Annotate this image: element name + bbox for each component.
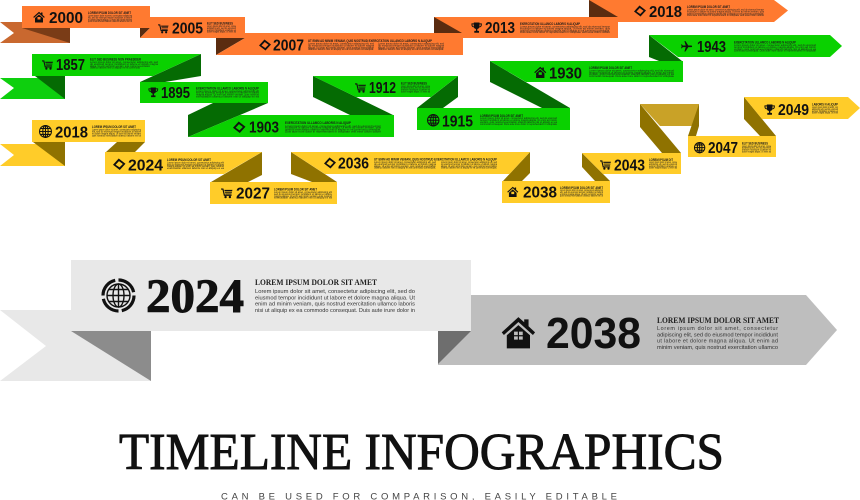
fold: green 1912 left <box>313 76 393 115</box>
segment: yellow 2024: Lorem ipsum dolor sit amet, consectetur adipiscing elit <box>167 161 224 164</box>
year: 2024: 2024 <box>146 270 244 323</box>
segment: yellow 2038: LOREM IPSUM DOLOR SIT AMET <box>560 186 604 190</box>
fold: yellow 2049 left <box>744 97 776 136</box>
fold: yellow 2018 left <box>33 142 65 166</box>
segment: yellow 2036: 2036 <box>338 156 369 172</box>
segment: green 1912: tempor incididunt ut labore et <box>401 89 430 92</box>
segment: yellow 2047: dolore magna aliqua. Ut enim ad <box>742 150 772 154</box>
segment: orange 2013: incididunt ut labore et dolore magna aliqua. Ut enim ad minim veniam, quis <box>520 27 611 30</box>
segment: yellow 2018: elit, sed do eiusmod tempor incididunt ut labore <box>92 130 142 134</box>
ribbon tail: yellow <box>0 144 65 166</box>
segment: orange 2000: quis nostrud exercitation ullamco laboris nisi ut <box>88 20 132 23</box>
ribbon tail: green <box>0 78 65 99</box>
segment: green 1895: 1895 <box>161 85 190 102</box>
segment: yellow 2038: 2038 <box>523 184 557 202</box>
text block: 2038 <box>657 315 779 351</box>
segment: yellow 2038: elit, sed do eiusmod tempor incididunt ut labore <box>560 191 604 194</box>
segment: green 1915: tempor incididunt ut labore et dolore magna aliqua. Ut enim ad minim <box>480 119 557 122</box>
segment: yellow 2024: magna aliqua. Ut enim ad minim veniam, quis nostrud <box>167 165 225 168</box>
segment: yellow 2043: dolore magna aliqua. Ut enim ad <box>649 167 678 170</box>
orange timeline ribbon <box>0 0 788 55</box>
segment: green 1857: 1857 <box>56 57 85 74</box>
segment: yellow 2024: exercitation ullamco laboris nisi ut aliquip ex ea <box>167 167 225 170</box>
segment: green 1857: do eiusmod tempor incididunt ut labore et dolore magna <box>90 63 159 66</box>
segment: yellow 2036 <box>291 152 530 174</box>
text block: 2038: minim veniam, quis nostrud exercitation ullamco <box>657 345 778 351</box>
icon: house <box>502 317 535 348</box>
icon: globe <box>103 280 134 311</box>
segment: green 1912 <box>313 76 458 97</box>
segment: yellow 2047 <box>688 136 776 157</box>
segment: green 1903: Duis aute irure dolor in reprehenderit in voluptate velit esse cillum dolore <box>285 130 382 134</box>
text block: 2024: eiusmod tempor incididunt ut labore et dolore magna aliqua. Ut <box>255 295 416 301</box>
segment: yellow 2036: do eiusmod tempor incididunt ut labore et dolore magna <box>441 163 498 166</box>
segment: green 1943: EXERCITATION ULLAMCO LABORIS N ALIQUIP <box>734 40 797 44</box>
segment: green 1930: Lorem ipsum dolor sit amet, consectetur adipiscing elit, sed do eiusmod <box>589 69 675 72</box>
segment: green 1912: 1912 <box>369 80 396 97</box>
segment: yellow 2027: 2027 <box>236 186 270 202</box>
segment: green 1857: ullamco laboris nisi ut aliquip ex ea commodo <box>90 67 141 70</box>
fold: orange 2000 <box>22 28 70 43</box>
segment: yellow 2018: 2018 <box>55 124 88 142</box>
segment: yellow 2027: magna aliqua. Ut enim ad minim veniam, quis nostrud <box>274 195 333 198</box>
segment: green 1930: 1930 <box>549 66 582 82</box>
segment: yellow 2049: adipiscing elit, sed do eiusmod <box>812 108 839 111</box>
segment: yellow 2047: ELIT SED BUSINESS <box>742 142 769 146</box>
segment: green 1930: tempor incididunt ut labore et dolore magna aliqua. Ut enim ad minim <box>589 71 674 74</box>
segment: orange 2018 <box>589 0 788 22</box>
fold: yellow 2024 right <box>211 152 262 182</box>
segment: orange 2000: LOREM IPSUM DOLOR SIT AMET <box>88 11 132 15</box>
segment: green 1930: commodo consequat. Duis aute irure dolor in reprehenderit in voluptate <box>589 75 675 78</box>
segment: yellow 2047: 2047 <box>708 140 738 157</box>
fold: green 1895 to 1903 <box>188 103 268 137</box>
segment: yellow 2024: 2024 <box>128 158 163 174</box>
text block: 2024: Lorem ipsum dolor sit amet, consectetur adipiscing elit, sed do <box>255 289 415 295</box>
segment: green 1943: tempor incididunt ut labore et dolore magna aliqua. Ut enim ad minim <box>734 46 816 49</box>
segment: orange 2005: adipiscing elit, sed do eiusmod <box>207 27 237 30</box>
segment: yellow 2036: aliqua. Ut enim ad minim veniam, quis nostrud exercitation <box>374 165 437 168</box>
text block: 2038: ut labore et dolore magna aliqua. Ut enim ad <box>657 339 778 345</box>
segment: green 1912: adipiscing elit, sed do eiusmod <box>401 87 431 90</box>
segment: green 1915 <box>417 108 570 130</box>
segment: orange 2005 <box>140 17 245 38</box>
segment: orange 2000 <box>22 6 150 28</box>
segment: yellow 2049: LABORIS N ALIQUIP <box>812 102 839 106</box>
fold: yellow upper loop right <box>688 104 699 136</box>
fold: green 1857 <box>35 76 65 99</box>
segment: orange 2000: Lorem ipsum dolor sit amet, consectetur adipiscing <box>88 14 133 18</box>
text block: 2038: Lorem ipsum dolor sit amet, consectetur <box>657 326 778 332</box>
fold: orange 2007 <box>216 38 245 55</box>
fold: orange 2018 <box>589 0 618 17</box>
title: TIMELINE INFOGRAPHICS <box>119 424 724 481</box>
fold: 2024 <box>71 331 151 381</box>
segment: green 1903 <box>188 115 394 137</box>
fold: green 1930 left <box>490 61 570 108</box>
segment: green 1912: Lorem ipsum dolor sit amet, conse <box>401 85 431 88</box>
segment: yellow 2038: Lorem ipsum dolor sit amet, consectetur adipiscing <box>560 189 604 192</box>
segment: yellow 2027 <box>210 182 337 204</box>
segment: orange 2000: elit, sed do eiusmod tempor incididunt ut labore <box>88 16 133 19</box>
segment: yellow 2047: tempor incididunt ut labore et <box>742 149 771 152</box>
fold: orange 2013 <box>434 17 462 33</box>
segment: green 1895: sed do eiusmod tempor incididunt ut labore et dolore <box>196 92 260 95</box>
segment: yellow 2036: ullamco laboris nisi ut aliquip ex ea commodo consequat. <box>374 167 436 170</box>
segment: green 1857: ELIT SED BUSINESS NON PRAESIDER <box>90 58 141 62</box>
segment: green 1943 <box>649 35 842 57</box>
segment: green 1912: ELIT SED BUSINESS <box>401 82 428 86</box>
enlarged detail: 2024 <box>0 260 471 381</box>
segment: orange 2005: ELIT SED BUSINESS <box>207 22 234 26</box>
segment: green 1930 <box>490 61 683 82</box>
yellow timeline ribbon <box>0 97 860 204</box>
year: 2038: 2038 <box>546 309 641 358</box>
segment: orange 2005: 2005 <box>172 20 203 38</box>
segment: yellow 2049: dolore magna aliqua. Ut enim <box>812 112 838 115</box>
segment: orange 2007: Lorem ipsum dolor sit amet, consectetur adipiscing elit, sed <box>308 42 375 46</box>
fold: yellow 2018 right <box>106 142 145 152</box>
segment: yellow 2043: 2043 <box>614 157 645 174</box>
segment: orange 2005: dolore magna aliqua. Ut enim ad <box>207 31 237 34</box>
enlarged detail: 2038 <box>438 295 837 365</box>
segment: yellow 2047: adipiscing elit, sed do eiusmod <box>742 147 772 150</box>
segment: orange 2007: UT ENIM AD MINIM VENIAM, QUIS NOSTRUD EXERCITATION ULLAMCO LABORIS N ALIQUIP <box>308 39 433 43</box>
segment: orange 2018: incididunt ut labore et dolore magna aliqua. Ut enim ad minim veniam, quis <box>687 10 765 13</box>
segment: orange 2007: Lorem ipsum dolor sit amet, consectetur adipiscing elit, sed <box>378 42 445 46</box>
segment: yellow 2049: tempor incididunt ut labore et <box>812 110 838 113</box>
banner: 2024 <box>71 260 471 331</box>
segment: green 1930: veniam, quis nostrud exercitation ullamco laboris nisi ut aliquip ex ea <box>589 73 675 76</box>
segment: green 1943: Lorem ipsum dolor sit amet, consectetur adipiscing elit, sed do eiusmod <box>734 44 817 47</box>
segment: orange 2007: ullamco laboris nisi ut aliquip ex ea commodo consequat. <box>308 48 374 51</box>
segment: green 1895: Lorem ipsum dolor sit amet, consectetur adipiscing elit <box>196 90 259 93</box>
segment: orange 2007: 2007 <box>273 38 304 54</box>
segment: orange 2013: 2013 <box>485 20 515 37</box>
segment: orange 2013: nostrud exercitation ullamco laboris nisi ut aliquip ex ea commodo consequat. <box>520 29 610 32</box>
fold: yellow 2036 right <box>503 152 530 181</box>
segment: green 1912: dolore magna aliqua. Ut enim ad <box>401 90 431 94</box>
segment: yellow 2036: do eiusmod tempor incididunt ut labore et dolore magna <box>374 163 437 166</box>
segment: green 1903: Lorem ipsum dolor sit amet, consectetur adipiscing elit, sed do eiusmod tempor <box>285 125 381 128</box>
segment: green 1895: exercitation ullamco laboris nisi ut aliquip ex ea <box>196 96 260 98</box>
ribbon tail: 2024 <box>0 310 151 381</box>
segment: green 1943: 1943 <box>697 39 726 56</box>
segment: yellow 2027: exercitation ullamco laboris nisi ut aliquip ex ea <box>274 197 333 200</box>
fold: yellow 2036 left <box>291 152 337 182</box>
segment: yellow 2018 <box>32 120 145 142</box>
segment: green 1857 <box>32 54 201 76</box>
segment: yellow 2043: adipiscing elit, sed do eiusmod <box>649 163 678 166</box>
ribbon tail: orange <box>0 22 70 43</box>
segment: yellow 2036: Lorem ipsum dolor sit amet, consectetur adipiscing elit, sed <box>441 161 498 164</box>
segment: yellow 2024: sed do eiusmod tempor incididunt ut labore et dolore <box>167 163 225 166</box>
fold: green 1912 right <box>417 76 458 108</box>
text block: 2038: adipiscing elit, sed do eiusmod tempor incididunt <box>657 332 779 338</box>
segment: green 1915: veniam, quis nostrud exercitation ullamco laboris nisi ut aliquip ex ea <box>480 121 558 124</box>
segment: orange 2013: Lorem ipsum dolor sit amet, consectetur adipiscing elit, sed do eiusmod tempor <box>520 26 610 28</box>
segment: orange 2000: et dolore magna aliqua. Ut enim ad minim veniam <box>88 18 132 21</box>
arrow banner: 2038 <box>438 295 837 365</box>
segment: green 1895: magna aliqua. Ut enim ad minim veniam, quis nostrud <box>196 94 260 97</box>
segment: yellow 2027: Lorem ipsum dolor sit amet, consectetur adipiscing elit <box>274 191 332 194</box>
fold: green 1943 left <box>649 35 682 61</box>
segment: green 1903: 1903 <box>249 120 279 136</box>
segment: yellow 2018: et dolore magna aliqua. Ut enim ad minim veniam <box>92 132 141 135</box>
segment: yellow 2036: aliqua. Ut enim ad minim veniam, quis nostrud exercitation <box>441 165 498 168</box>
segment: green 1930: LOREM IPSUM DOLOR SIT AMET <box>589 66 633 70</box>
segment: yellow 2047: Lorem ipsum dolor sit amet, conse <box>742 145 772 148</box>
segment: yellow 2024: LOREM IPSUM DOLOR SIT AMET <box>167 158 212 162</box>
segment: yellow 2027: LOREM IPSUM DOLOR SIT AMET <box>274 188 318 192</box>
segment: yellow 2038: et dolore magna aliqua. Ut enim ad minim veniam <box>560 193 603 196</box>
segment: orange 2018: Lorem ipsum dolor sit amet, consectetur adipiscing elit, sed do eiusmod tempor <box>687 8 764 12</box>
segment: yellow 2018: quis nostrud exercitation ullamco laboris nisi ut <box>92 134 141 137</box>
segment: green 1915: Lorem ipsum dolor sit amet, consectetur adipiscing elit, sed do eiusmod <box>480 117 558 120</box>
segment: yellow 2024 <box>105 152 262 174</box>
text block: 2024 <box>255 277 416 314</box>
text block: 2038: LOREM IPSUM DOLOR SIT AMET <box>657 315 779 325</box>
segment: orange 2007 <box>216 33 463 55</box>
green timeline ribbon <box>0 35 842 137</box>
text block: 2024: nisi ut aliquip ex ea commodo consequat. Duis aute irure dolor in <box>255 308 415 314</box>
segment: orange 2007: do eiusmod tempor incididunt ut labore et dolore magna <box>378 44 445 47</box>
segment: green 1857: aliqua. Ut enim ad minim veniam, quis nostrud exercitation <box>90 65 151 68</box>
segment: green 1903: EXERCITATION ULLAMCO LABORIS N ALIQUIP <box>285 121 352 125</box>
segment: yellow 2043: LOREM IPSUM DIT <box>649 158 674 162</box>
segment: yellow 2049: 2049 <box>778 102 809 119</box>
segment: orange 2005: Lorem ipsum dolor sit amet, conse <box>207 25 237 28</box>
fold: yellow upper loop light <box>640 104 699 126</box>
segment: green 1895: EXERCITATION ULLAMCO LABORIS N ALIQUIP <box>196 86 260 90</box>
segment: green 1903: incididunt ut labore et dolore magna aliqua. Ut enim ad minim veniam, quis <box>285 127 382 130</box>
segment: green 1943: commodo consequat. Duis aute irure dolor in reprehenderit in voluptate <box>734 50 817 53</box>
segment: yellow 2043: tempor incididunt ut labore et <box>649 165 677 168</box>
segment: green 1903: nostrud exercitation ullamco laboris nisi ut aliquip ex ea commodo consequat. <box>285 129 381 132</box>
segment: yellow 2018: Lorem ipsum dolor sit amet, consectetur adipiscing <box>92 129 142 132</box>
segment: orange 2000: 2000 <box>49 10 83 27</box>
segment: yellow 2027: sed do eiusmod tempor incididunt ut labore et dolore <box>274 193 333 196</box>
segment: orange 2013: Duis aute irure dolor in reprehenderit in voluptate velit esse cillum dolore <box>520 31 611 34</box>
fold: yellow upper loop dark <box>640 104 681 153</box>
fold: green 1857 to 1895 <box>140 54 201 82</box>
text block: 2024: enim ad minim veniam, quis nostrud exercitation ullamco laboris <box>255 302 415 308</box>
segment: orange 2007: aliqua. Ut enim ad minim veniam, quis nostrud exercitation <box>308 46 375 49</box>
segment: yellow 2038 <box>502 181 610 203</box>
segment: green 1857: Lorem ipsum dolor sit amet, consectetur adipiscing elit, sed <box>90 61 159 64</box>
segment: yellow 2043 <box>582 153 681 174</box>
segment: yellow 2038: quis nostrud exercitation ullamco laboris nisi ut <box>560 195 603 198</box>
segment: orange 2007: ullamco laboris nisi ut aliquip ex ea commodo consequat. <box>378 48 444 51</box>
segment: orange 2013 <box>434 17 618 38</box>
segment: orange 2018: Duis aute irure dolor in reprehenderit in voluptate velit esse cillum dolore <box>687 14 765 17</box>
segment: green 1895 <box>140 82 268 103</box>
segment: yellow 2049 <box>744 97 860 119</box>
segment: orange 2013: EXERCITATION ULLAMCO LABORIS N ALIQUIP <box>520 22 581 26</box>
segment: green 1915: 1915 <box>442 113 473 130</box>
segment: orange 2018: 2018 <box>649 4 682 21</box>
segment: orange 2007: aliqua. Ut enim ad minim veniam, quis nostrud exercitation <box>378 46 445 49</box>
text block: 2024: LOREM IPSUM DOLOR SIT AMET <box>255 277 377 287</box>
segment: yellow 2036: Lorem ipsum dolor sit amet, consectetur adipiscing elit, sed <box>374 161 437 164</box>
segment: yellow 2043: Lorem ipsum dolor sit amet, conse <box>649 161 678 164</box>
segment: green 1943: veniam, quis nostrud exercitation ullamco laboris nisi ut aliquip ex ea <box>734 48 817 51</box>
segment: orange 2018: nostrud exercitation ullamco laboris nisi ut aliquip ex ea commodo consequat. <box>687 12 764 15</box>
segment: yellow 2036: ullamco laboris nisi ut aliquip ex ea commodo consequat. <box>441 167 497 170</box>
segment: orange 2018: LOREM IPSUM DOLOR SIT AMET <box>687 5 731 9</box>
segment: yellow 2018: LOREM IPSUM DOLOR SIT AMET <box>92 125 137 129</box>
segment: orange 2005: tempor incididunt ut labore et <box>207 29 236 32</box>
segment: yellow 2049: Lorem ipsum dolor sit amet, con <box>812 106 839 109</box>
segment: green 1915: LOREM IPSUM DOLOR SIT AMET <box>480 114 524 118</box>
segment: yellow 2036: UT ENIM AD MINIM VENIAM, QUIS NOSTRUD EXERCITATION ULLAMCO LABORIS N ALIQUIP <box>374 158 498 162</box>
fold: 2038 <box>438 331 471 364</box>
segment: green 1915: commodo consequat. Duis aute irure dolor in reprehenderit in voluptate <box>480 123 558 126</box>
fold: yellow 2043 left <box>582 153 610 181</box>
segment: orange 2007: do eiusmod tempor incididunt ut labore et dolore magna <box>308 44 375 47</box>
fold: orange 2005 <box>140 28 150 38</box>
